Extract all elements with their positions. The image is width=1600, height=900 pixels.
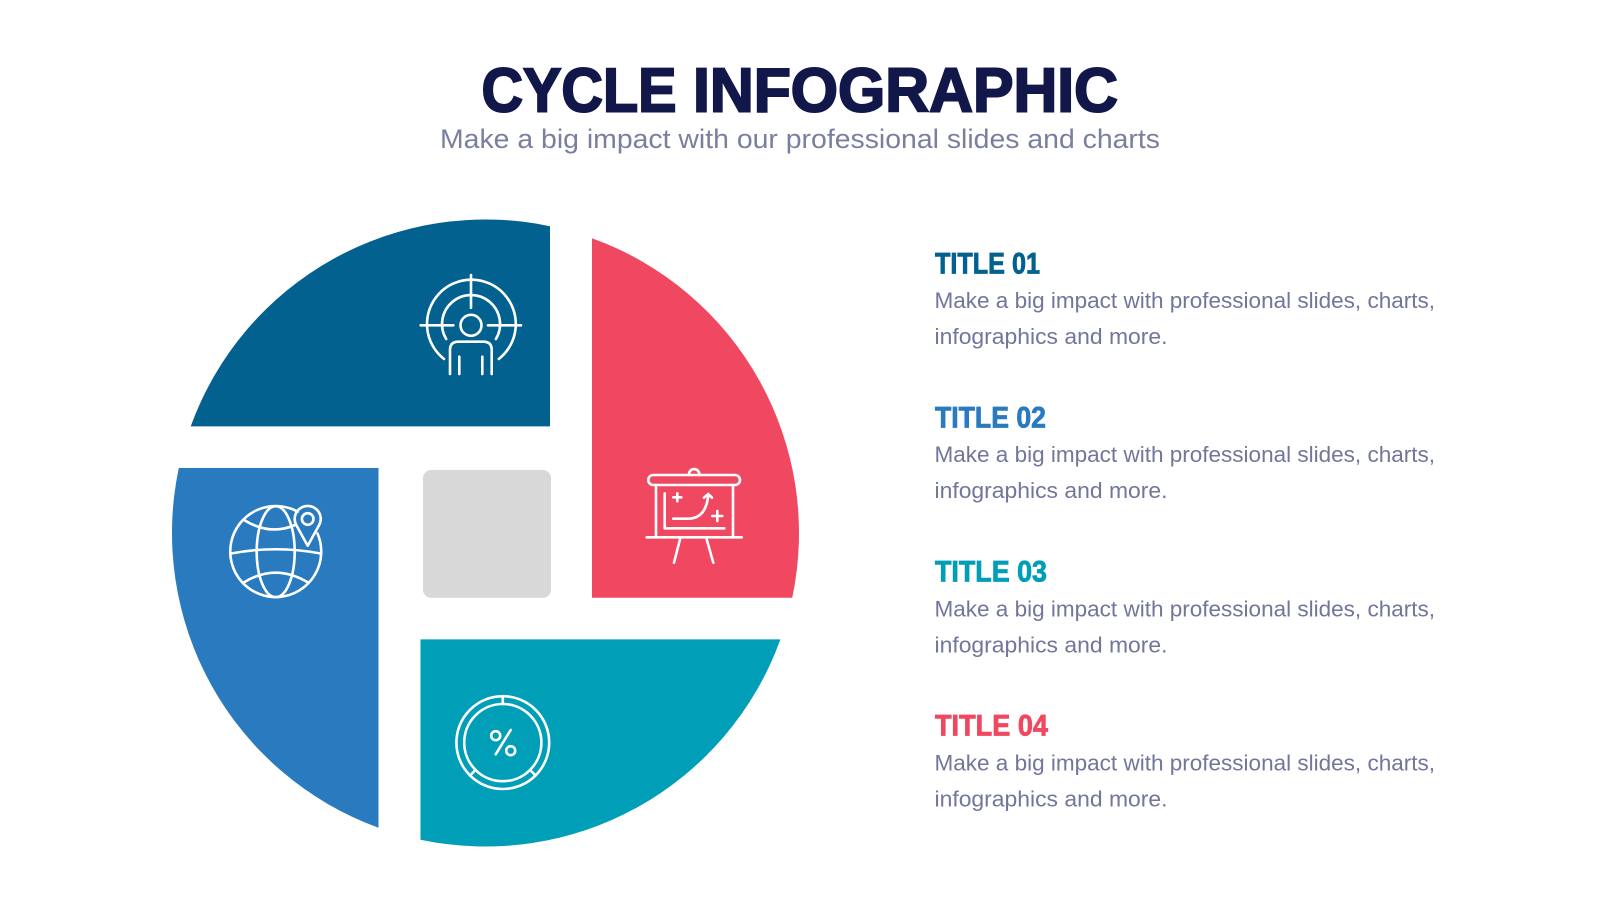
text block 01 [934, 248, 1435, 349]
text block 03: Make a big impact with professional slides, charts, [934, 596, 1435, 622]
text block 02: Make a big impact with professional slides, charts, [934, 442, 1435, 467]
icon: target person [421, 275, 521, 374]
text block 04: infographics and more. [934, 786, 1168, 812]
text block 02: infographics and more. [934, 478, 1168, 503]
title: INFOGRAPHIC [693, 56, 1118, 126]
icon: percent dial [456, 696, 549, 789]
text block 02 [934, 402, 1435, 503]
text block 01: TITLE 01 [935, 248, 1040, 280]
text block 03 [934, 556, 1435, 658]
segment: teal, bottom right [420, 639, 780, 847]
centre square [423, 470, 551, 598]
icon: presentation board [647, 469, 742, 563]
cycle diagram [172, 219, 799, 847]
segment: red, top right [592, 238, 799, 598]
title [482, 56, 1118, 126]
text block 01: Make a big impact with professional slides, charts, [934, 288, 1435, 313]
text block 01: infographics and more. [934, 324, 1168, 349]
text block 03: infographics and more. [934, 632, 1168, 658]
segment: blue, bottom left [172, 468, 378, 828]
text block 04 [934, 710, 1435, 812]
text block 02: TITLE 02 [935, 402, 1046, 434]
text block 03: TITLE 03 [935, 556, 1047, 588]
text block 04: Make a big impact with professional slides, charts, [934, 750, 1435, 776]
title: CYCLE [482, 56, 676, 126]
icon: globe with pin [230, 506, 321, 597]
segment: dark blue, top left [191, 219, 550, 426]
subtitle: Make a big impact with our professional slides and charts [440, 124, 1160, 154]
text block 04: TITLE 04 [935, 710, 1049, 742]
